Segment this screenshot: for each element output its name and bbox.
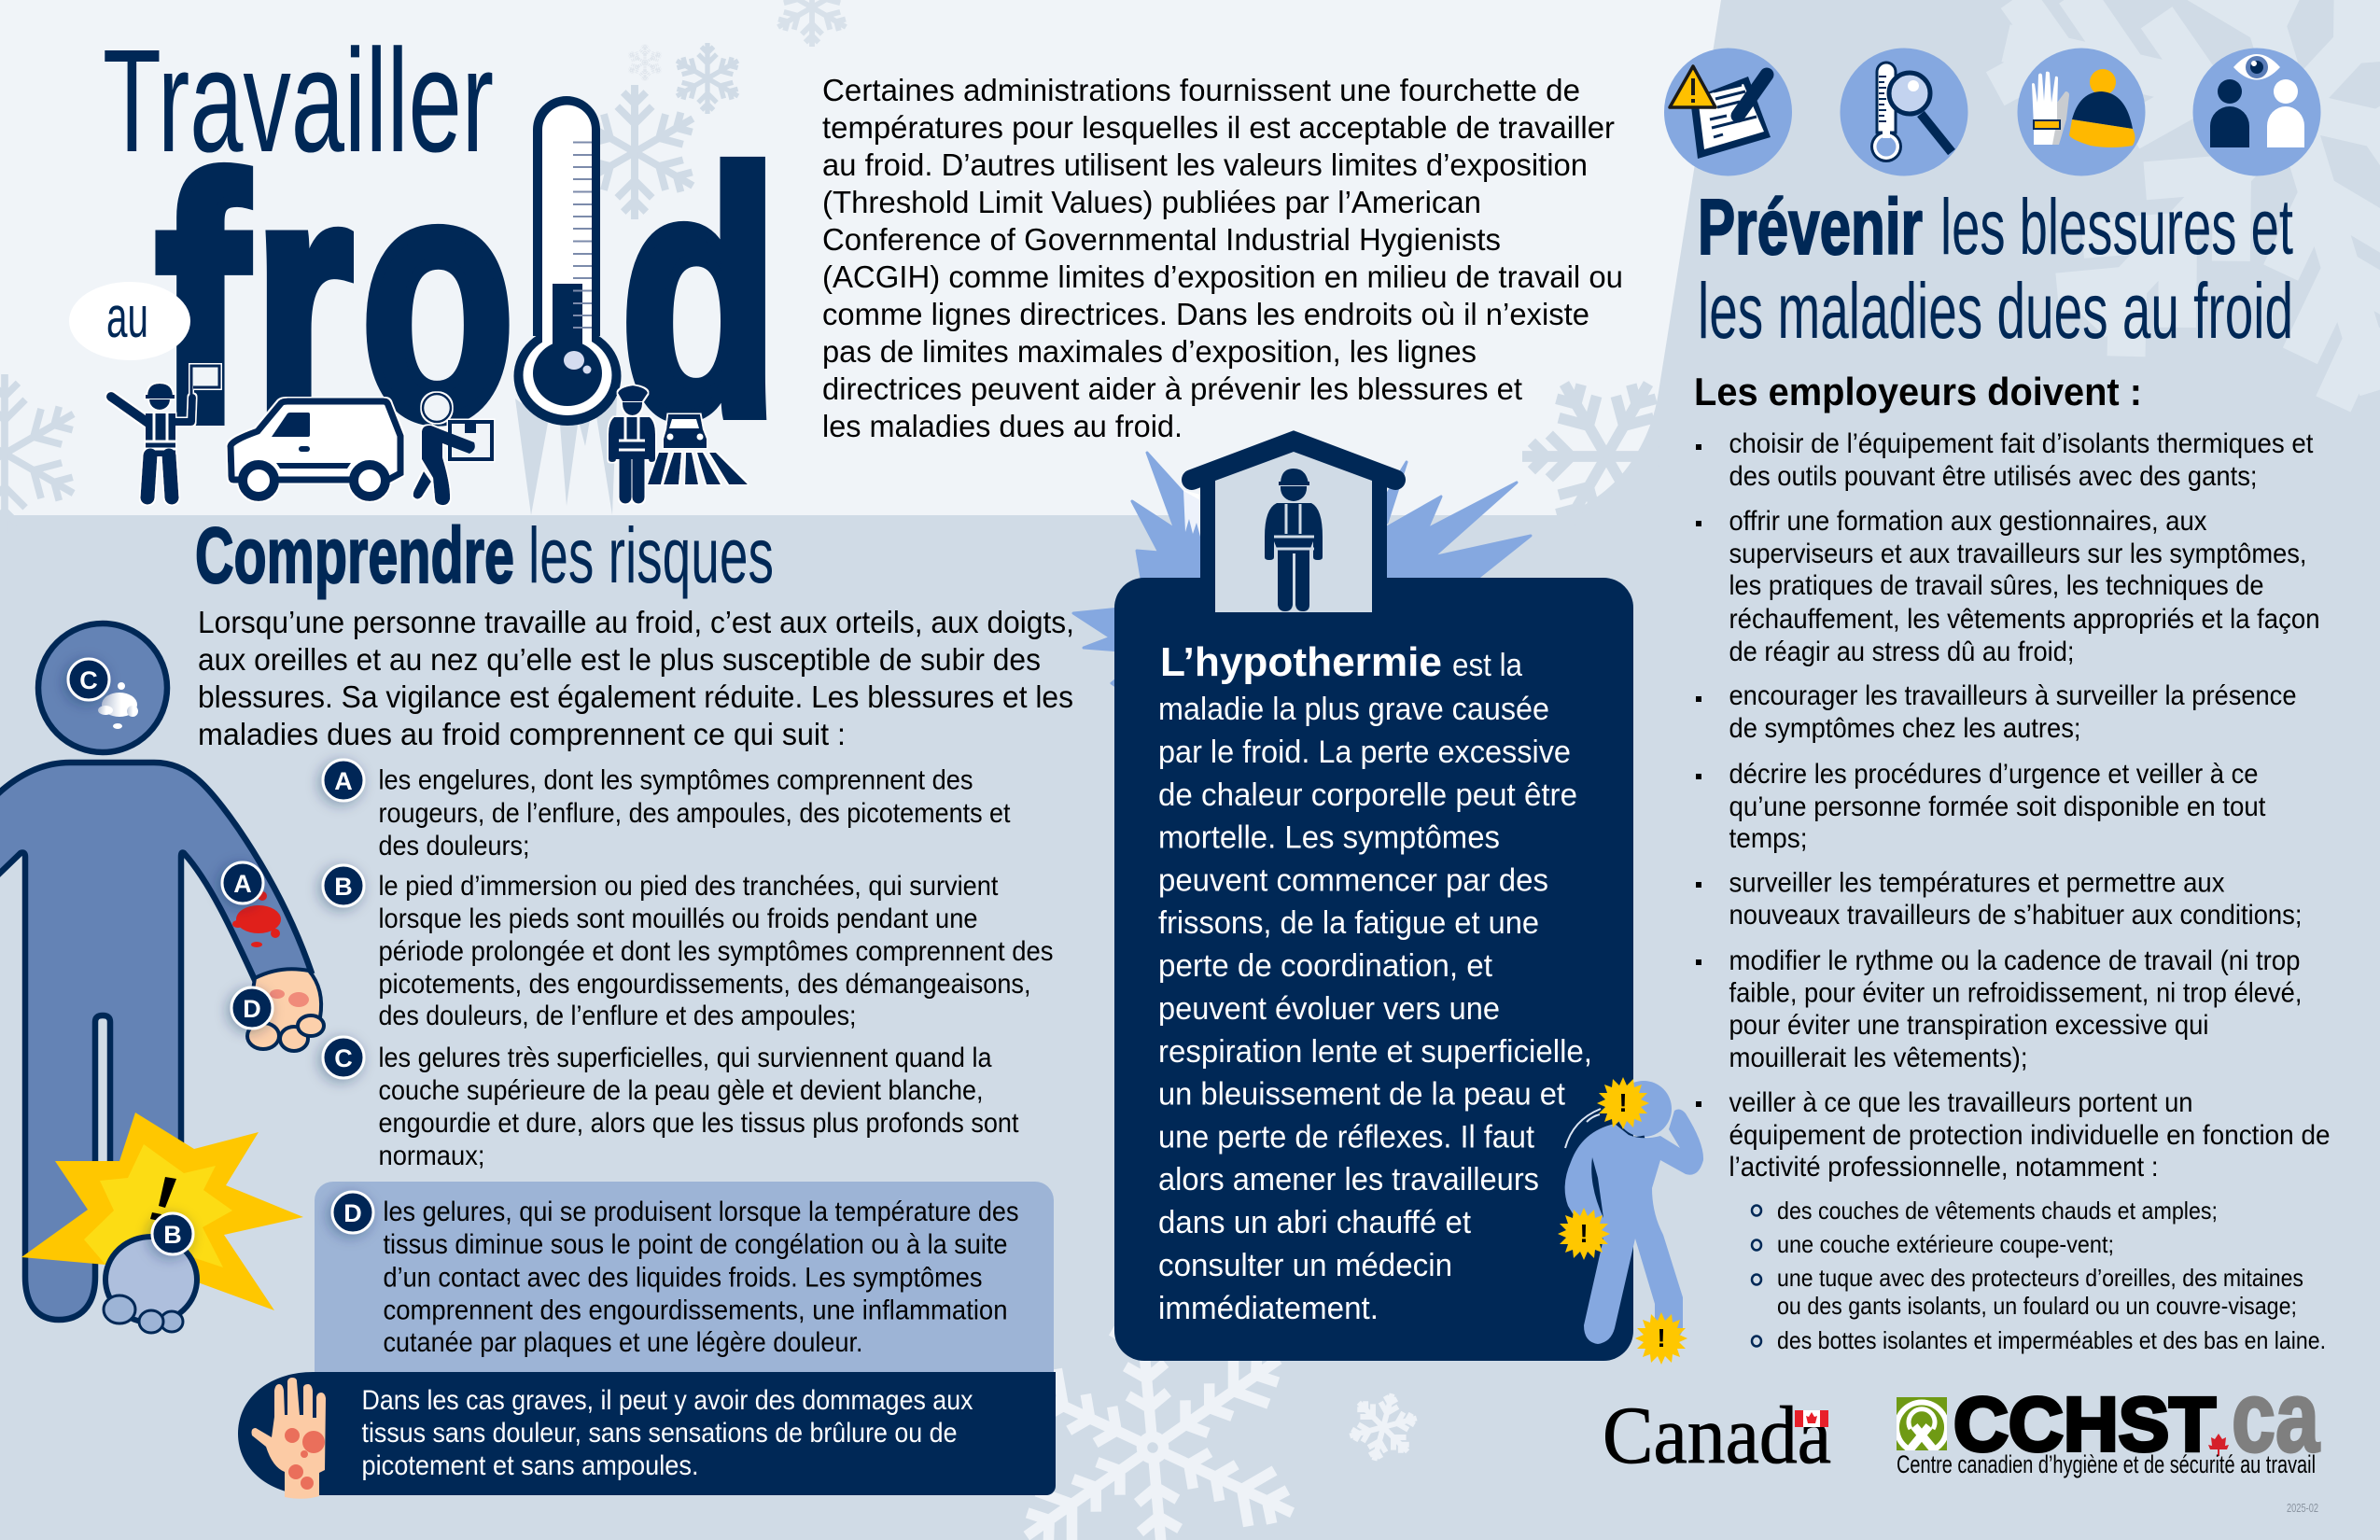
list: employer duties: modifier le rythme ou la cadence de travail (ni trop: [1729, 945, 2300, 976]
text block: risks intro: blessures. Sa vigilance est également réduite. Les blessures et les: [198, 680, 1073, 715]
text block: intro: (ACGIH) comme limites d’exposition en milieu de travail ou: [822, 260, 1623, 295]
list: employer duties: qu’une personne formée soit disponible en tout: [1729, 791, 2266, 822]
icon: person with hypothermia symptoms: [1558, 1077, 1703, 1365]
item D highlighted: d’un contact avec des liquides froids. Les symptômes: [383, 1262, 982, 1294]
list: employer duties: de symptômes chez les autres;: [1729, 713, 2081, 744]
list: employer duties: des outils pouvant être utilisés avec des gants;: [1729, 461, 2257, 492]
icicles under thermometer: [515, 397, 617, 515]
item C: normaux;: [379, 1141, 485, 1171]
list: employer duties: superviseurs et aux travailleurs sur les symptômes,: [1729, 539, 2307, 569]
badge B on foot: B: [163, 1221, 182, 1249]
text block: risks intro: Lorsqu’une personne travaille au froid, c’est aux orteils, aux doigts,: [198, 606, 1074, 640]
item B: période prolongée et dont les symptômes comprennent des: [379, 936, 1053, 967]
title word: froid (letters f r o d): f: [156, 107, 250, 493]
frostbite on arm: [232, 891, 281, 947]
text block: intro: Conference of Governmental Industrial Hygienists: [822, 223, 1501, 258]
list: employer duties: encourager les travailleurs à surveiller la présence: [1729, 680, 2296, 711]
title word: froid (letters f r o d): r: [254, 107, 353, 493]
badge D on hand: [231, 987, 273, 1029]
hypothermia text: peuvent évoluer vers une: [1158, 991, 1500, 1027]
logo: CCHST.ca: CCHST: [1953, 1382, 2216, 1467]
sub-list bullets: [1752, 1206, 1761, 1346]
text block: intro: directrices peuvent aider à prévenir les blessures et: [822, 372, 1523, 407]
item A: rougeurs, de l’enflure, des ampoules, des picotements et: [379, 798, 1010, 829]
heading: Prévenir les blessures et les maladies dues au froid: [1698, 183, 2293, 355]
icon: shelter: [1183, 441, 1395, 612]
hypothermia text: de chaleur corporelle peut être: [1158, 777, 1577, 813]
icon row: prevention: [1664, 49, 2320, 175]
badge D on hand: D: [243, 995, 261, 1023]
title line: Travailler: Travailler: [103, 20, 494, 183]
badge A on arm: A: [233, 870, 252, 898]
item A: des douleurs;: [379, 831, 530, 861]
frostnip patch on head: [98, 693, 138, 717]
list: employer duties: nouveaux travailleurs de s’habituer aux conditions;: [1729, 900, 2302, 931]
hypothermia text: par le froid. La perte excessive: [1158, 735, 1571, 770]
item B: des douleurs, de l’enflure et des ampoules;: [379, 1001, 857, 1031]
text block: risks intro: aux oreilles et au nez qu’elle est le plus susceptible de subir des: [198, 643, 1041, 678]
list: employer duties: faible, pour éviter un refroidissement, ni trop élevé,: [1729, 978, 2302, 1008]
callout text: picotement et sans ampoules.: [362, 1450, 698, 1481]
item C: [323, 1037, 1019, 1171]
hypothermia text: L’hypothermie: [1160, 639, 1442, 685]
text block: intro: Certaines administrations fournissent une fourchette de: [822, 74, 1580, 108]
icon: damaged hand: [252, 1378, 326, 1499]
item B: [323, 865, 1053, 1031]
figure body: [0, 763, 311, 1320]
bullets: [1696, 444, 1701, 1107]
text block: intro: températures pour lesquelles il est acceptable de travailler: [822, 111, 1615, 146]
symptom burst: head: !: [1618, 1088, 1628, 1117]
item D highlighted: tissus diminue sous le point de congélation ou à la suite: [383, 1229, 1008, 1260]
burst behind shelter: [1073, 453, 1531, 689]
icon: glove and hat: [2018, 49, 2145, 175]
item C: engourdie et dure, alors que les tissus plus profonds sont: [379, 1108, 1019, 1139]
list: employer duties: surveiller les températures et permettre aux: [1729, 868, 2225, 898]
hypothermia text: frissons, de la fatigue et une: [1158, 905, 1539, 941]
list: employer duties: offrir une formation aux gestionnaires, aux: [1729, 506, 2207, 537]
hypothermia text: alors amener les travailleurs: [1158, 1162, 1539, 1197]
badge B on foot: [152, 1213, 193, 1254]
text block: intro: (Threshold Limit Values) publiées par l’American: [822, 186, 1481, 220]
burst behind foot: [21, 1113, 303, 1310]
symptom burst: head: [1597, 1077, 1649, 1129]
callout: severe cases: [238, 1372, 1056, 1499]
icon: thermometer and magnifier: [1841, 49, 1967, 175]
sub-list: protective equipment: [1752, 1197, 2326, 1354]
hypothermia text: immédiatement.: [1158, 1291, 1379, 1326]
icon: road safety officer and car: [609, 385, 748, 497]
list: employer duties: équipement de protection individuelle en fonction de: [1729, 1120, 2330, 1151]
text block: intro: les maladies dues au froid.: [822, 410, 1183, 444]
list: employer duties: veiller à ce que les travailleurs portent un: [1729, 1087, 2193, 1118]
item B: le pied d’immersion ou pied des tranchées, qui survient: [379, 871, 999, 902]
list: employer duties: réchauffement, les vêtements appropriés et la façon: [1729, 604, 2320, 635]
text block: intro: pas de limites maximales d’exposition, les lignes: [822, 335, 1477, 370]
text block: intro: [822, 74, 1623, 444]
item B: picotements, des engourdissements, des démangeaisons,: [379, 969, 1030, 1000]
hypothermia text: consulter un médecin: [1158, 1248, 1452, 1283]
title word: froid (letters f r o d): [156, 102, 778, 493]
CCHST emblem: [1897, 1397, 1947, 1452]
hypothermia text: respiration lente et superficielle,: [1158, 1034, 1592, 1070]
item A: les engelures, dont les symptômes comprennent des: [379, 765, 973, 795]
list: employer duties: temps;: [1729, 823, 1807, 854]
bubble: au: au: [106, 286, 148, 350]
figure head: [38, 623, 167, 752]
hypothermia text: perte de coordination, et: [1158, 948, 1493, 984]
hypothermia text: peuvent commencer par des: [1158, 862, 1548, 898]
text block: risks intro: [198, 606, 1074, 752]
item D highlighted: [315, 1182, 1054, 1381]
subheading: employers must: Les employeurs doivent :: [1694, 370, 2142, 413]
icon: people and eye: [2193, 49, 2320, 175]
item B: lorsque les pieds sont mouillés ou froids pendant une: [379, 903, 978, 934]
badge C on head: C: [79, 666, 98, 694]
symptom burst: foot: !: [1657, 1323, 1666, 1352]
item C: les gelures très superficielles, qui surviennent quand la: [379, 1043, 992, 1073]
item D highlighted: D: [343, 1199, 362, 1227]
sub-list: protective equipment: une tuque avec des protecteurs d’oreilles, des mitaines: [1777, 1264, 2303, 1292]
item D highlighted: les gelures, qui se produisent lorsque la température des: [383, 1197, 1019, 1227]
item D highlighted: cutanée par plaques et une légère douleur.: [383, 1327, 862, 1358]
list: employer duties: [1696, 428, 2330, 1183]
logo: Canada: Canada: [1603, 1391, 1831, 1481]
panel: hypothermia: [1114, 441, 1633, 1361]
hypothermia text: [1158, 639, 1592, 1326]
panel: list of cold injuries: [315, 760, 1054, 1381]
callout text: Dans les cas graves, il peut y avoir des dommages aux: [362, 1385, 973, 1416]
list: employer duties: l’activité professionnelle, notamment :: [1729, 1152, 2158, 1183]
item B: B: [334, 873, 353, 901]
icon: delivery person with box: [413, 394, 492, 505]
hypothermia text: un bleuissement de la peau et: [1158, 1077, 1566, 1113]
worker in shelter: [1265, 469, 1323, 611]
item A: [323, 760, 1010, 861]
Canadian flag: [1795, 1410, 1828, 1427]
illustration: human figure with cold injuries: [0, 623, 324, 1333]
text block: intro: au froid. D’autres utilisent les valeurs limites d’exposition: [822, 148, 1588, 183]
hypothermia text: maladie la plus grave causée: [1158, 692, 1549, 727]
hypothermia text: mortelle. Les symptômes: [1158, 819, 1500, 855]
title word: froid (letters f r o d): d: [621, 102, 778, 487]
list: employer duties: pour éviter une transpiration excessive qui: [1729, 1010, 2208, 1041]
hand redness: [270, 989, 309, 1007]
maple leaf: [2208, 1434, 2229, 1456]
icon: checklist with warning: [1664, 49, 1792, 175]
hand: [247, 969, 324, 1051]
hypothermia text: dans un abri chauffé et: [1158, 1205, 1472, 1240]
date code: 2025-02: [2287, 1501, 2318, 1515]
item A: A: [334, 767, 353, 795]
icon: flag worker: [111, 366, 219, 497]
badge A on arm: [222, 862, 263, 903]
item C: C: [334, 1044, 353, 1072]
text block: risks intro: maladies dues au froid comprennent ce qui suit :: [198, 718, 846, 752]
symptom burst: hip: [1558, 1208, 1610, 1260]
title: Travailler au froid: [69, 20, 778, 493]
list: employer duties: les pratiques de travail sûres, les techniques de: [1729, 570, 2264, 601]
item C: couche supérieure de la peau gèle et devient blanche,: [379, 1075, 984, 1106]
list: employer duties: choisir de l’équipement fait d’isolants thermiques et: [1729, 428, 2313, 459]
title word: froid (letters f r o d): o: [361, 105, 514, 490]
symptom burst: hip: !: [1579, 1219, 1589, 1248]
logo: CCHST.ca: ca: [2232, 1360, 2320, 1473]
callout text: tissus sans douleur, sans sensations de brûlure ou de: [362, 1418, 958, 1449]
heading: Comprendre les risques: Comprendre: [195, 511, 514, 599]
heading: Prévenir les blessures et les maladies dues au froid: Prévenir: [1698, 183, 1923, 271]
sub-list: protective equipment: des couches de vêtements chauds et amples;: [1777, 1197, 2218, 1225]
hypothermia text: est la: [1452, 648, 1522, 683]
icon: delivery van: [231, 401, 400, 497]
icon: thermometer as the letter i: [513, 96, 622, 426]
badge C on head: [68, 659, 109, 700]
list: employer duties: mouillerait les vêtements);: [1729, 1043, 2027, 1073]
item D highlighted: comprennent des engourdissements, une inflammation: [383, 1295, 1008, 1325]
callout text: [362, 1385, 973, 1481]
sub-list: protective equipment: ou des gants isolants, un foulard ou un couvre-visage;: [1777, 1292, 2297, 1320]
hypothermia text: une perte de réflexes. Il faut: [1158, 1120, 1535, 1155]
list: employer duties: décrire les procédures d’urgence et veiller à ce: [1729, 759, 2259, 790]
bubble: au: [69, 282, 190, 360]
exclamation mark: [150, 1177, 176, 1221]
sub-list: protective equipment: des bottes isolantes et imperméables et des bas en laine.: [1777, 1326, 2326, 1354]
foot: [104, 1237, 197, 1333]
text block: intro: comme lignes directrices. Dans les endroits où il n’existe: [822, 298, 1589, 332]
sub-list: protective equipment: une couche extérieure coupe-vent;: [1777, 1230, 2114, 1258]
symptom burst: foot: [1635, 1312, 1687, 1365]
frostnip droplets: [113, 682, 125, 729]
list: employer duties: de réagir au stress dû au froid;: [1729, 637, 2074, 667]
heading: Comprendre les risques: les risques: [528, 511, 774, 599]
logo: CCHST.ca: [1897, 1395, 2321, 1478]
